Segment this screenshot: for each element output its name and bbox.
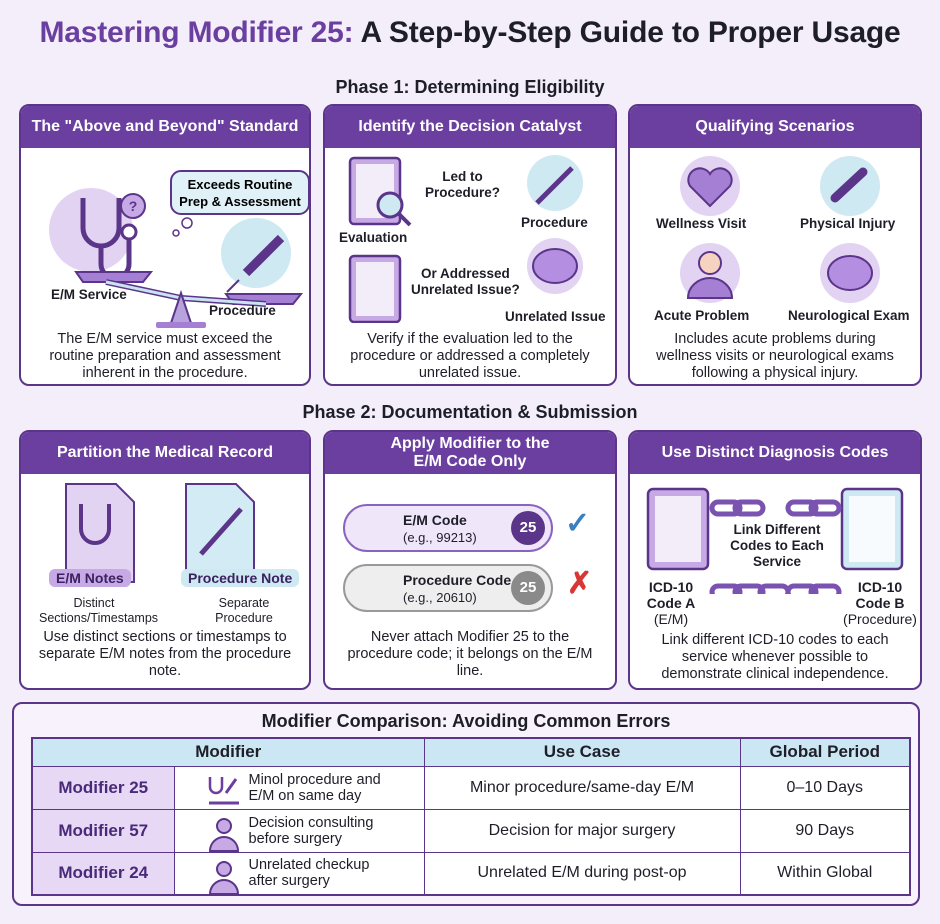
- icons: heart, bone, person, brain: [680, 156, 880, 303]
- table: [31, 737, 911, 896]
- table: Modifier: [195, 742, 261, 761]
- panel: decision catalyst: Evaluation: [339, 230, 407, 245]
- panel: partition: [19, 430, 311, 690]
- row: procedure code wrong: (e.g., 20610): [403, 590, 477, 605]
- icon: check: ✓: [565, 507, 590, 540]
- panel: decision catalyst: [323, 104, 617, 386]
- panel: qualifying scenarios: Acute Problem: [654, 308, 749, 323]
- text block: The E/M service must exceed the routine preparation and assessment inherent in the procedure.: [49, 331, 281, 381]
- icon: scale with stethoscope and syringe: Prep & Assessment: [179, 194, 301, 209]
- panel: comparison table: [12, 702, 920, 906]
- row: E/M code correct: [343, 504, 553, 552]
- icon: scale with stethoscope and syringe: [49, 170, 309, 328]
- table: Modifier 57: [58, 820, 148, 840]
- icons: clipboards and chains: [646, 488, 904, 594]
- table: before surgery: [248, 830, 342, 846]
- table: Minor procedure/same-day E/M: [470, 778, 694, 796]
- panel: qualifying scenarios: Physical Injury: [800, 216, 895, 231]
- table: Within Global: [777, 864, 872, 881]
- panel: decision catalyst: Led to: [442, 169, 483, 184]
- panel: decision catalyst: Procedure: [521, 215, 588, 230]
- panel: qualifying scenarios: Qualifying Scenarios: [695, 118, 855, 135]
- panel: distinct diagnosis: Code A: [647, 595, 695, 611]
- panel: partition: Partition the Medical Record: [57, 444, 273, 461]
- text block: Never attach Modifier 25 to the procedure code; it belongs on the E/M line.: [347, 629, 593, 679]
- panel: distinct diagnosis: (Procedure): [843, 611, 917, 627]
- panel: partition: Procedure: [215, 611, 273, 625]
- panel: apply modifier: [323, 430, 617, 690]
- icons: documents: [65, 483, 255, 583]
- panel: distinct diagnosis: Link Different Codes to Each Service: [730, 522, 824, 569]
- table: Use Case: [544, 742, 620, 761]
- panel: partition: E/M Notes: [56, 570, 124, 586]
- panel: above and beyond: E/M Service: [51, 287, 127, 302]
- icons: clipboards, scalpel, brain: [348, 155, 583, 323]
- panel: above and beyond: The "Above and Beyond" Standard: [32, 118, 298, 135]
- row: procedure code wrong: 25: [520, 579, 536, 596]
- row: procedure code wrong: [343, 564, 553, 612]
- panel: distinct diagnosis: [628, 430, 922, 690]
- panel: partition: Distinct: [74, 596, 114, 610]
- text block: Verify if the evaluation led to the procedure or addressed a completely unrelated issue.: [350, 331, 590, 381]
- table: Minol procedure and: [248, 772, 381, 788]
- panel: distinct diagnosis: Code B: [856, 595, 904, 611]
- panel: distinct diagnosis: ICD-10: [649, 579, 693, 595]
- panel: partition: Sections/Timestamps: [39, 611, 158, 625]
- row: E/M code correct: E/M Code: [403, 512, 467, 528]
- panel: decision catalyst: Or Addressed: [421, 266, 510, 281]
- panel: decision catalyst: Unrelated Issue?: [411, 282, 520, 297]
- icon: cross: ✗: [567, 567, 592, 600]
- phase 2 heading: Phase 2: Documentation & Submission: [302, 402, 638, 422]
- panel: qualifying scenarios: Wellness Visit: [656, 216, 746, 231]
- panel: decision catalyst: Unrelated Issue: [505, 309, 606, 324]
- text block: Includes acute problems during wellness visits or neurological exams following a physical injury.: [656, 331, 894, 381]
- table: Decision for major surgery: [489, 822, 675, 838]
- table: Unrelated checkup: [248, 857, 369, 873]
- table: Decision consulting: [248, 814, 373, 830]
- panel: qualifying scenarios: Neurological Exam: [788, 308, 910, 323]
- icon: scale with stethoscope and syringe: ?: [129, 198, 137, 214]
- phase 1 heading: Phase 1: Determining Eligibility: [335, 77, 605, 97]
- panel: distinct diagnosis: ICD-10: [858, 579, 902, 595]
- panel: decision catalyst: Identify the Decision Catalyst: [358, 118, 582, 135]
- icons: table row icons: [208, 777, 239, 894]
- table: 90 Days: [795, 822, 854, 838]
- table heading: Modifier Comparison: Avoiding Common Errors: [262, 711, 670, 731]
- row: E/M code correct: 25: [520, 519, 536, 536]
- text block: Use distinct sections or timestamps to separate E/M notes from the procedure note.: [39, 629, 291, 679]
- table: after surgery: [248, 873, 330, 889]
- table: 0–10 Days: [786, 778, 863, 796]
- panel: above and beyond: Procedure: [209, 303, 276, 318]
- table: Unrelated E/M during post-op: [478, 864, 686, 881]
- panel: apply modifier: Apply Modifier to the: [390, 435, 550, 452]
- row: procedure code wrong: Procedure Code: [403, 572, 511, 588]
- row: E/M code correct: (e.g., 99213): [403, 530, 477, 545]
- panel: partition: Separate: [219, 596, 269, 610]
- table: E/M on same day: [248, 788, 361, 804]
- panel: above and beyond: [19, 104, 311, 386]
- panel: qualifying scenarios: [628, 104, 922, 386]
- table: Global Period: [769, 742, 880, 761]
- table: Modifier 24: [58, 863, 148, 882]
- panel: decision catalyst: Procedure?: [425, 185, 500, 200]
- panel: apply modifier: E/M Code Only: [414, 453, 526, 470]
- table: Modifier 25: [58, 778, 148, 796]
- title: Mastering Modifier 25: A Step-by-Step Guide to Proper Usage: [39, 16, 901, 49]
- text block: Link different ICD-10 codes to each service whenever possible to demonstrate clinical independence.: [661, 632, 889, 682]
- panel: partition: Procedure Note: [188, 570, 292, 586]
- panel: distinct diagnosis: Use Distinct Diagnosis Codes: [662, 444, 888, 461]
- icon: scale with stethoscope and syringe: Exceeds Routine: [188, 177, 292, 192]
- panel: distinct diagnosis: (E/M): [654, 611, 688, 627]
